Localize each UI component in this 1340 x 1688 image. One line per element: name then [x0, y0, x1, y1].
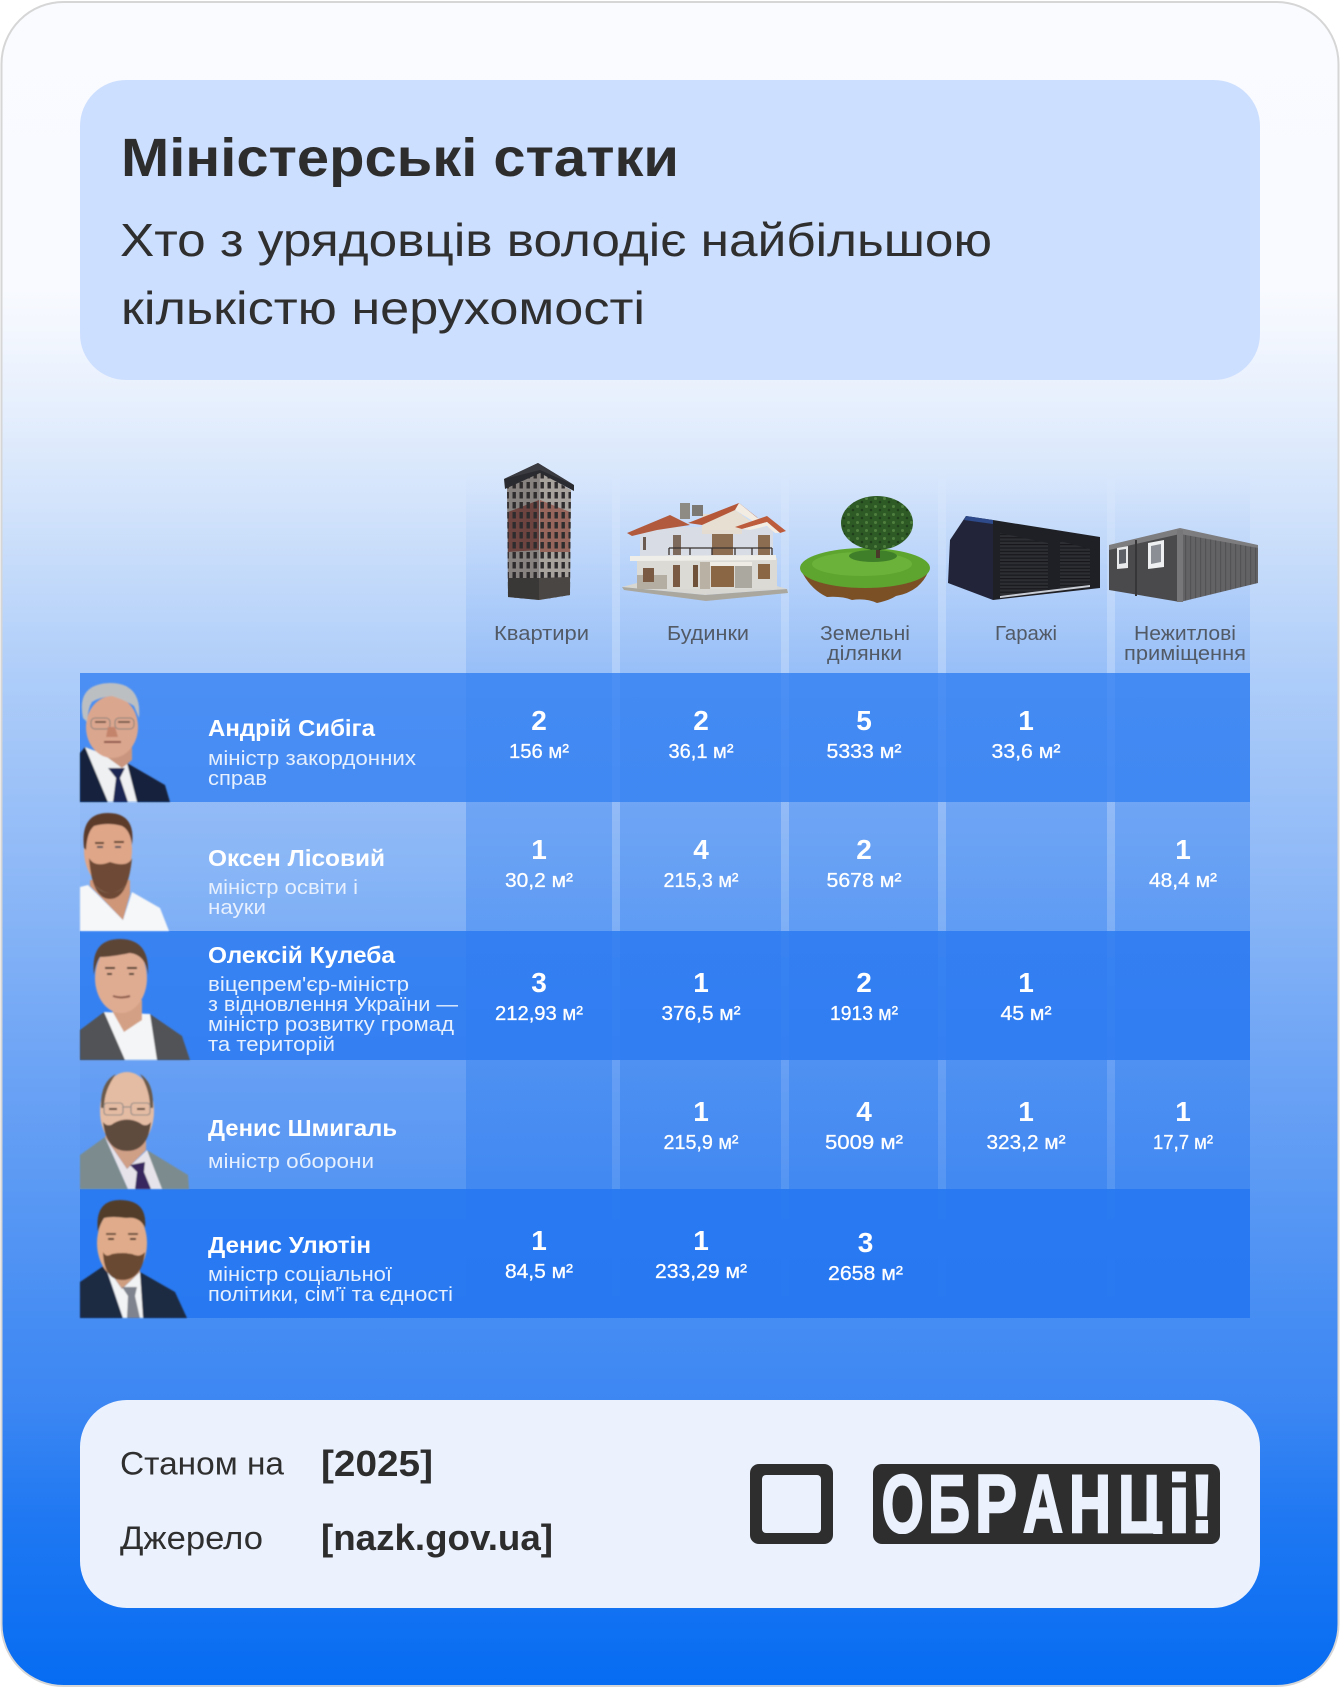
values: 1: [1175, 834, 1191, 865]
values: 45 м²: [1000, 1003, 1052, 1025]
values: 36,1 м²: [668, 741, 734, 763]
logo: Ц: [1118, 1459, 1162, 1550]
column headers: Гаражі: [995, 623, 1057, 645]
values: 1: [693, 1225, 709, 1256]
name and role: міністр закордонних: [208, 748, 416, 770]
values: 3: [531, 967, 547, 998]
icon: land plot with tree: [800, 496, 930, 603]
name and role: [208, 942, 458, 1056]
icon: apartment building: [504, 463, 574, 600]
even row cell tint: [466, 802, 1250, 1189]
values: 2: [531, 705, 547, 736]
logo: А: [1023, 1459, 1063, 1550]
row: Андрій Сибіга: [80, 683, 1061, 802]
values: 215,3 м²: [664, 870, 739, 892]
source: Джерело: [120, 1520, 263, 1556]
values: 48,4 м²: [1149, 870, 1217, 892]
column headers: Будинки: [667, 623, 749, 645]
column headers: Нежитлові: [1134, 623, 1236, 645]
values: 212,93 м²: [495, 1003, 583, 1025]
values: [509, 705, 1061, 763]
values: 2: [693, 705, 709, 736]
portrait: Лісовий: [80, 813, 169, 931]
values: 1: [1018, 705, 1034, 736]
values: 30,2 м²: [505, 870, 573, 892]
name and role: [208, 1115, 397, 1173]
values: 156 м²: [509, 741, 569, 763]
portrait: Сибіга: [80, 683, 170, 802]
row: Оксен Лісовий: [80, 813, 1217, 931]
name and role: Олексій Кулеба: [208, 942, 395, 968]
name and role: [208, 715, 416, 790]
as-of date: Станом на: [120, 1446, 284, 1482]
values: [495, 967, 1052, 1025]
values: 33,6 м²: [992, 741, 1061, 763]
values: 233,29 м²: [655, 1261, 747, 1283]
values: 84,5 м²: [505, 1261, 573, 1283]
logo: і: [1168, 1459, 1190, 1550]
name and role: політики, сім'ї та єдності: [208, 1284, 453, 1306]
panel: header: [80, 80, 1260, 380]
values: 1: [1175, 1096, 1191, 1127]
values: 5: [856, 705, 872, 736]
values: [505, 834, 1217, 892]
values: 1913 м²: [830, 1003, 898, 1025]
values: 5333 м²: [826, 741, 902, 763]
name and role: Андрій Сибіга: [208, 715, 375, 741]
source: [nazk.gov.ua]: [321, 1517, 553, 1558]
values: 3: [858, 1227, 873, 1258]
portrait: Улютін: [80, 1200, 187, 1318]
values: 4: [693, 834, 709, 865]
logo: Б: [928, 1459, 970, 1550]
values: 1: [693, 1096, 709, 1127]
values: 2658 м²: [828, 1263, 903, 1285]
values: 2: [856, 967, 872, 998]
values: 2: [856, 834, 872, 865]
values: 323,2 м²: [986, 1132, 1066, 1154]
values: 17,7 м²: [1153, 1132, 1213, 1154]
table rows background: [80, 673, 1250, 1318]
portrait: Кулеба: [80, 939, 190, 1060]
column headers: Квартири: [494, 623, 589, 645]
values: 1: [531, 1225, 547, 1256]
name and role: науки: [208, 897, 266, 919]
values: [664, 1096, 1213, 1154]
name and role: та територій: [208, 1034, 335, 1056]
subtitle: [120, 214, 992, 334]
values: 4: [856, 1096, 872, 1127]
name and role: справ: [208, 768, 267, 790]
values: 5678 м²: [826, 870, 902, 892]
source: [120, 1517, 553, 1558]
name and role: з відновлення України —: [208, 994, 458, 1016]
row: Денис Улютін: [80, 1200, 903, 1318]
subtitle: Хто з урядовців володіє найбільшою: [120, 214, 992, 266]
column headers: [494, 623, 1246, 665]
name and role: віцепрем'єр-міністр: [208, 974, 409, 996]
values: 5009 м²: [825, 1132, 903, 1154]
logo: [750, 1464, 1220, 1544]
icon: garage: [948, 516, 1100, 600]
values: 1: [1018, 1096, 1034, 1127]
portrait: Шмигаль: [80, 1072, 189, 1189]
logo: !: [1190, 1459, 1214, 1550]
name and role: [208, 845, 385, 919]
icon: house: [622, 503, 788, 601]
values: 1: [531, 834, 547, 865]
column headers: приміщення: [1124, 643, 1246, 665]
values: [505, 1225, 903, 1285]
subtitle: кількістю нерухомості: [121, 282, 645, 334]
logo: О: [882, 1459, 924, 1550]
values: 376,5 м²: [662, 1003, 741, 1025]
logo: Р: [975, 1459, 1017, 1550]
table column bands: [466, 470, 1250, 1318]
row: Олексій Кулеба: [80, 939, 1052, 1060]
values: 1: [1018, 967, 1034, 998]
name and role: Денис Шмигаль: [208, 1115, 397, 1141]
column headers: Земельні: [820, 623, 910, 645]
as-of date: [2025]: [321, 1443, 433, 1484]
name and role: міністр соціальної: [208, 1264, 392, 1286]
column headers: ділянки: [827, 643, 902, 665]
row: Денис Шмигаль: [80, 1072, 1213, 1189]
name and role: міністр розвитку громад: [208, 1014, 454, 1036]
name and role: [208, 1232, 453, 1306]
name and role: Денис Улютін: [208, 1232, 371, 1258]
name and role: Оксен Лісовий: [208, 845, 385, 871]
icon: non-residential container: [1109, 528, 1258, 602]
values: 1: [693, 967, 709, 998]
logo: Н: [1069, 1459, 1111, 1550]
panel: footer: [80, 1400, 1260, 1608]
name and role: міністр оборони: [208, 1151, 374, 1173]
as-of date: [120, 1443, 433, 1484]
name and role: міністр освіти і: [208, 877, 358, 899]
values: 215,9 м²: [664, 1132, 739, 1154]
title: Міністерські статки: [121, 128, 679, 188]
